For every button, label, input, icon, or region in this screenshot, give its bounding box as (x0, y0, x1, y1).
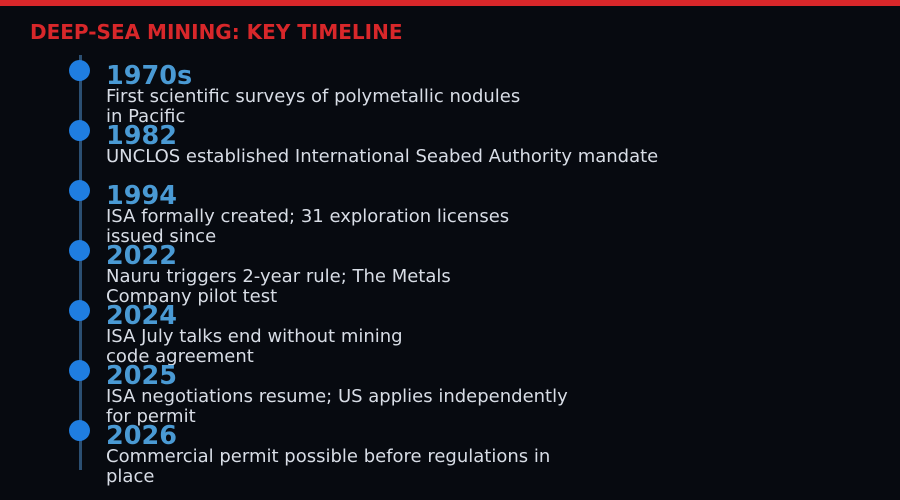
entry: 1970s (69, 60, 520, 127)
timeline line (78, 55, 82, 470)
entry: 1994 (69, 180, 509, 247)
entry: 1994: 1994 (106, 181, 177, 211)
entry: 2026: 2026 (106, 421, 177, 451)
entry: 2024: 2024 (106, 301, 177, 331)
entry: 2026: Commercial permit possible before regulations in place (106, 446, 550, 487)
entry: 2022 (69, 240, 451, 307)
entry: 2026 (69, 420, 550, 487)
entry: 1982: UNCLOS established International Seabed Authority mandate (106, 146, 658, 167)
entry: 2022: Nauru triggers 2-year rule; The Metals Company pilot test (106, 266, 451, 307)
entry: 2022: 2022 (106, 241, 177, 271)
entry: 2024: ISA July talks end without mining code agreement (106, 326, 403, 367)
entry: 2025: ISA negotiations resume; US applies independently for permit (106, 386, 568, 427)
title: DEEP-SEA MINING: KEY TIMELINE (30, 20, 403, 44)
entry: 1970s: First scientific surveys of polymetallic nodules in Pacific (106, 86, 520, 127)
entry: 1982: 1982 (106, 121, 177, 151)
entry: 1982 (69, 120, 658, 167)
entry: 2025 (69, 360, 568, 427)
entry: 1970s: 1970s (106, 61, 192, 91)
entry: 1994: ISA formally created; 31 exploration licenses issued since (106, 206, 509, 247)
entry: 2024 (69, 300, 403, 367)
entry: 2025: 2025 (106, 361, 177, 391)
